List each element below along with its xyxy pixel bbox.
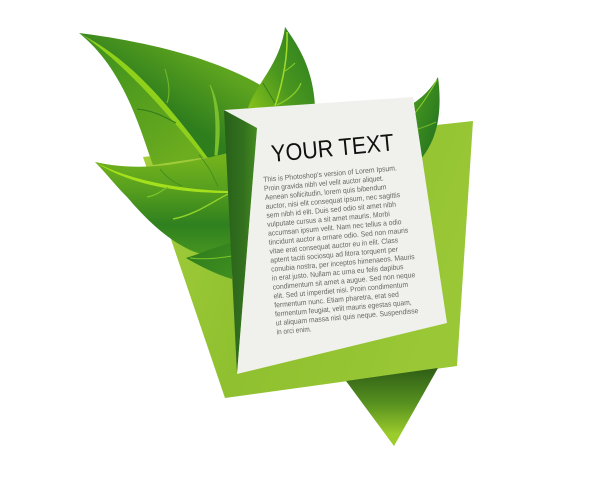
body text: Proin gravida nibh vel velit auctor aliquet. <box>264 174 384 193</box>
icon: dark lower leaf <box>186 243 232 279</box>
downward triangle <box>346 368 438 446</box>
dark fold of the card <box>224 110 257 374</box>
body text: aptent taciti sociosqu ad litora torquent per <box>270 245 399 265</box>
body text: vulputate cursus a sit amet mauris. Morbi <box>267 209 390 229</box>
icon: large leaf <box>79 33 300 170</box>
white card <box>224 97 447 374</box>
body text <box>263 162 421 336</box>
body text: ut aliquam massa nisl quis neque. Suspendisse <box>275 306 419 327</box>
green folded panel <box>143 121 473 398</box>
body text: sem nibh id elit. Duis sed odio sit amet nibh <box>266 200 396 220</box>
body text: accumsan ipsum velit. Nam nec tellus a odio <box>268 217 402 238</box>
body text: fermentum nunc. Etiam pharetra, erat sed <box>274 290 399 310</box>
body text: Aenean sollicitudin, lorem quis bibendum <box>264 182 387 202</box>
body text: tincidunt auctor a ornare odio. Sed non mauris <box>268 226 409 247</box>
title: YOUR TEXT <box>270 129 395 168</box>
body text: in erat justo. Nullam ac urna eu felis dapibus <box>272 262 404 283</box>
body text: in orci enim. <box>276 324 312 336</box>
body text: This is Photoshop's version of Lorem Ipsum. <box>263 163 397 184</box>
icon: right leaf <box>412 77 440 160</box>
body text: auctor, nisi elit consequat ipsum, nec sagittis <box>265 190 401 211</box>
body text: fermentum feugiat, velit mauris egestas quam, <box>275 298 412 318</box>
body text: conubia nostra, per inceptos himenaeos. Mauris <box>271 252 415 274</box>
body text: elit. Sed ut imperdiet nisi. Proin condimentum <box>273 280 408 301</box>
icon: small top leaf <box>248 27 315 108</box>
body text: vitae erat consequat auctor eu in elit. Class <box>269 235 399 256</box>
body text: condimentum sit amet a augue. Sed non neque <box>272 270 416 292</box>
icon: middle leaf <box>95 152 232 255</box>
